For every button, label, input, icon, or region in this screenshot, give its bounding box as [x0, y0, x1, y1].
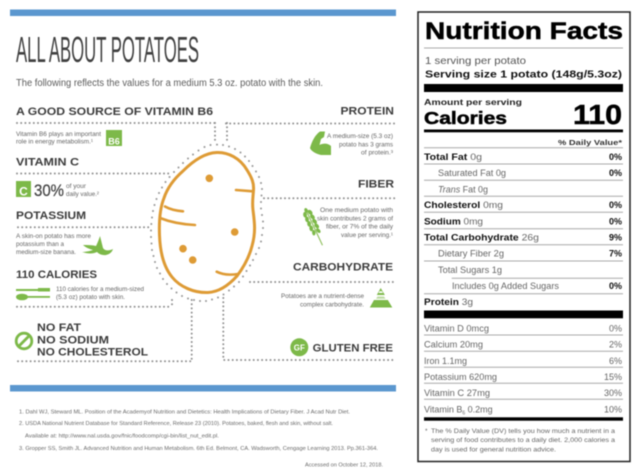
- row: trans fat: Trans Fat 0g: [438, 184, 488, 194]
- icon: c badge: C: [19, 184, 28, 198]
- section: protein: [310, 106, 394, 156]
- row: vitamin b6: Vitamin B: [424, 404, 462, 414]
- row: iron: [424, 356, 622, 366]
- row: vitamin b6: 0.2mg: [465, 404, 493, 414]
- section: 110 calories: (5.3 oz) potato with skin.: [56, 294, 125, 301]
- footnote: day is used for general nutrition advice.: [431, 446, 556, 454]
- footnote: serving of food contributes to a daily diet. 2,000 calories a: [431, 437, 615, 444]
- potato marks: [160, 174, 253, 275]
- row: sodium: [424, 216, 622, 226]
- row: total carbohydrate: 9%: [609, 232, 622, 242]
- section: protein: potato has 3 grams: [339, 142, 394, 148]
- label border: [418, 12, 630, 462]
- row: dietary fiber: Dietary Fiber 2g: [438, 248, 504, 258]
- section: carbohydrate: Potatoes are a nutrient-dense: [281, 293, 364, 300]
- section: carbohydrate: CARBOHYDRATE: [293, 262, 393, 274]
- icon: prohibition sign: [16, 333, 32, 349]
- row: total fat: [424, 152, 622, 162]
- section: vitamin c: daily value.²: [66, 191, 100, 198]
- row: iron: Iron 1.1mg: [424, 356, 467, 366]
- section: no fat, sodium, cholesterol: NO FAT: [37, 322, 81, 334]
- calories: Amount per serving: [424, 98, 522, 107]
- panel: all about potatoes: ALL ABOUT POTATOES: [16, 29, 199, 70]
- row: total fat: 0%: [609, 152, 622, 162]
- row: potassium: Potassium 620mg: [424, 372, 497, 382]
- section: gluten free: GLUTEN FREE: [313, 343, 393, 355]
- row: vitamin c: Vitamin C 27mg: [424, 388, 490, 398]
- icon: wheat: [300, 206, 328, 248]
- icon: gf badge: GF: [294, 343, 305, 352]
- section: fiber: One medium potato with: [320, 207, 393, 214]
- row: sodium: Sodium 0mg: [424, 216, 483, 226]
- section: potassium: potassium than a: [16, 241, 64, 248]
- row: total sugars: Total Sugars 1g: [438, 265, 502, 275]
- row: cholesterol: [424, 200, 622, 210]
- footnote: The % Daily Value (DV) tells you how much a nutrient in a: [431, 428, 615, 435]
- dotted outline around potato: [150, 144, 264, 302]
- section: potassium: A skin-on potato has more: [16, 233, 91, 240]
- section: fiber: skin contributes 2 grams of: [317, 216, 393, 222]
- references: [19, 410, 383, 468]
- calories: 110: [573, 99, 622, 130]
- section: 110 calories: [16, 269, 144, 301]
- section: potassium: [16, 210, 113, 256]
- calories: [424, 98, 622, 130]
- section: vitamin c: [16, 156, 100, 200]
- section: protein: of protein.³: [361, 150, 394, 156]
- section: protein: PROTEIN: [340, 106, 394, 118]
- row: vitamin c: 30%: [604, 388, 622, 398]
- row: total fat: Total Fat 0g: [424, 152, 482, 162]
- icon: b6 badge: B6: [108, 136, 120, 146]
- row: added sugars: 0%: [609, 281, 622, 291]
- panel: all about potatoes: [10, 10, 396, 468]
- row: vitamin b6: 10%: [604, 404, 622, 414]
- section: no fat, sodium, cholesterol: [16, 322, 148, 359]
- section: 110 calories: 110 CALORIES: [16, 269, 97, 281]
- icon: food pyramid: [370, 288, 392, 308]
- row: calcium: 2%: [609, 340, 622, 350]
- row: total carbohydrate: Total Carbohydrate 26g: [424, 232, 539, 242]
- section: fiber: value per serving.¹: [341, 232, 394, 239]
- references: 3. Gropper SS, Smith JL. Advanced Nutrition and Human Metabolism. 6th Ed. Belmont, CA. Wadsworth, Cengage Learning 2013. Pp.361-364.: [19, 446, 378, 452]
- section: vitamin c: VITAMIN C: [16, 156, 79, 168]
- row: vitamin d: 0%: [609, 323, 622, 333]
- icon: fork and spoon: [16, 288, 50, 300]
- row: cholesterol: 0%: [609, 200, 622, 210]
- footnote: *: [425, 428, 428, 435]
- section: fiber: FIBER: [358, 179, 394, 191]
- subtitle: The following reflects the values for a medium 5.3 oz. potato with the skin.: [16, 78, 323, 89]
- row: vitamin b6: [424, 404, 622, 416]
- section: potassium: POTASSIUM: [16, 210, 86, 222]
- references: Available at: http://www.nal.usda.gov/fnic/foodcomp/cgi-bin/list_nut_edit.pl.: [25, 434, 219, 440]
- section: potassium: medium-size banana.: [16, 249, 76, 256]
- panel: nutrition facts label: [418, 12, 630, 462]
- bottom blue bar: [10, 385, 396, 392]
- section: vitamin b6: Vitamin B6 plays an important: [16, 131, 101, 138]
- section: carbohydrate: [281, 262, 393, 309]
- references: Accessed on October 12, 2018.: [305, 462, 383, 468]
- potato illustration: [150, 144, 264, 302]
- section: fiber: fiber, or 7% of the daily: [326, 224, 394, 231]
- section: vitamin c: 30%: [34, 181, 64, 200]
- row: calcium: Calcium 20mg: [424, 340, 483, 350]
- row: saturated fat: 0%: [609, 168, 622, 178]
- icon: banana peel: [82, 236, 113, 255]
- section: carbohydrate: complex carbohydrate.: [300, 302, 364, 309]
- row: potassium: 15%: [604, 372, 622, 382]
- row: vitamin c: [424, 388, 622, 398]
- row: vitamin d: Vitamin D 0mcg: [424, 323, 489, 333]
- row: protein: Protein 3g: [424, 297, 473, 307]
- section: vitamin b6: A GOOD SOURCE OF VITAMIN B6: [16, 106, 213, 118]
- section: vitamin b6: [16, 106, 213, 146]
- section: 110 calories: 110 calories for a medium-sized: [56, 286, 144, 293]
- section: vitamin c: of your: [66, 183, 87, 190]
- row: dietary fiber: 7%: [609, 248, 622, 258]
- row: calcium: [424, 340, 622, 350]
- row: potassium: [424, 372, 622, 382]
- daily value header: % Daily Value*: [558, 138, 622, 147]
- row: iron: 6%: [609, 356, 622, 366]
- top blue bar: [10, 10, 396, 16]
- row: total carbohydrate: [424, 232, 622, 242]
- calories: Calories: [424, 108, 507, 128]
- row: added sugars: [452, 281, 622, 291]
- references: 1. Dahl WJ, Steward ML. Position of the Academyof Nutrition and Dietetics: Health Implications of Dietary Fiber. J Acad Nutr Diet.: [19, 410, 350, 416]
- references: 2. USDA National Nutrient Database for Standard Reference, Release 23 (2010). Potatoes, baked, flesh and skin, without salt.: [19, 421, 333, 427]
- row: added sugars: Includes 0g Added Sugars: [452, 281, 560, 291]
- section: no fat, sodium, cholesterol: NO CHOLESTEROL: [37, 347, 148, 359]
- section: protein: A medium-size (5.3 oz): [327, 133, 393, 140]
- serving information: 1 serving per potato: [425, 55, 526, 67]
- row: cholesterol: Cholesterol 0mg: [424, 200, 503, 210]
- icon: b6 badge: [106, 130, 122, 146]
- nutrition facts title: Nutrition Facts: [425, 18, 623, 45]
- potato outline: [159, 152, 255, 293]
- section: no fat, sodium, cholesterol: NO SODIUM: [37, 334, 109, 346]
- icon: flexed arm: [310, 132, 331, 155]
- serving information: [425, 55, 622, 80]
- row: saturated fat: Saturated Fat 0g: [438, 168, 506, 178]
- section: vitamin b6: role in energy metabolism.¹: [16, 138, 94, 146]
- row: sodium: 0%: [609, 216, 622, 226]
- footnote: [425, 428, 615, 454]
- serving information: Serving size 1 potato (148g/5.3oz): [425, 68, 622, 80]
- section: gluten free: [290, 338, 393, 356]
- row: saturated fat: [438, 168, 622, 178]
- row: vitamin d: [424, 323, 622, 333]
- row: vitamin b6: 6: [462, 410, 465, 416]
- section: fiber: [300, 179, 394, 248]
- row: dietary fiber: [438, 248, 622, 258]
